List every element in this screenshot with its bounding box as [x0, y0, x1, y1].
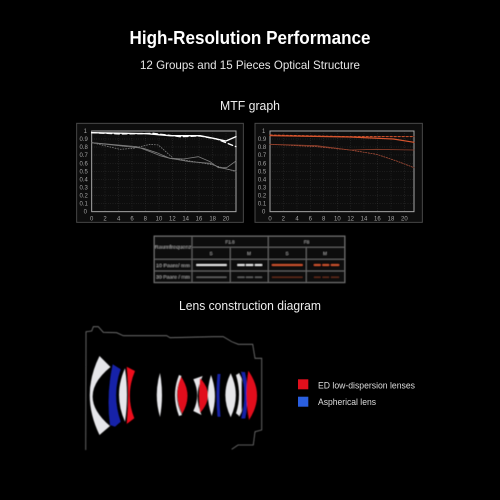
chart: MTF F8 (orange curves): 0.1 [258, 201, 267, 207]
legend: aspherical lens: Aspherical lens [318, 397, 376, 407]
legend table: F1.8 [225, 240, 235, 244]
lens barrel outline [86, 327, 262, 450]
chart: MTF F1.8 (white curves): 0.6 [80, 161, 88, 167]
chart: MTF F1.8 (white curves): 16 [196, 216, 203, 222]
chart: MTF F8 (orange curves): 0.4 [258, 177, 267, 183]
chart: MTF F8 (orange curves): 6 [309, 216, 313, 222]
legend: ED low-dispersion lenses: ED low-dispersion lenses [318, 380, 415, 390]
chart: MTF F8 (orange curves): 4 [295, 216, 299, 222]
lens group 3 [175, 371, 257, 420]
legend table: Raumfrequenz [154, 244, 192, 250]
chart: MTF F8 (orange curves): 0.9 [258, 137, 267, 143]
chart: MTF F1.8 (white curves): 1 [84, 129, 88, 135]
chart: MTF F8 (orange curves): 8 [322, 216, 326, 222]
legend: aspherical lens [298, 397, 376, 407]
chart: MTF F8 (orange curves): 0.5 [258, 169, 267, 175]
chart: MTF F1.8 (white curves): 0.3 [80, 185, 88, 191]
chart: MTF F8 (orange curves): 0.2 [258, 193, 267, 199]
chart: MTF F8 (orange curves): 0.3 [258, 185, 267, 191]
chart: MTF F8 (orange curves): 14 [361, 216, 368, 222]
chart: MTF F1.8 (white curves): 10 [156, 216, 163, 222]
chart: MTF F1.8 (white curves): 0 [84, 209, 88, 215]
legend table: 10 Paare/ mm [156, 263, 190, 268]
heading: MTF graph: MTF graph [220, 98, 280, 113]
chart: MTF F8 (orange curves): 0 [262, 209, 266, 215]
legend table: 30 Paare / mm [156, 275, 190, 280]
chart: MTF F8 (orange curves): 2 [282, 216, 286, 222]
chart: MTF F1.8 (white curves) [77, 123, 243, 222]
chart: MTF F8 (orange curves): 18 [388, 216, 395, 222]
chart: MTF F8 (orange curves): 0 [268, 216, 272, 222]
chart: MTF F8 (orange curves): 0.8 [258, 145, 267, 151]
chart: MTF F1.8 (white curves): 8 [144, 216, 148, 222]
chart: MTF F1.8 (white curves): 2 [103, 216, 107, 222]
chart: MTF F1.8 (white curves): 0.9 [80, 137, 88, 143]
chart: MTF F1.8 (white curves): 0.2 [80, 193, 88, 199]
chart: MTF F1.8 (white curves): 0 [90, 216, 94, 222]
legend table [154, 236, 345, 283]
chart: MTF F1.8 (white curves): 0.7 [80, 153, 88, 159]
legend table: S [209, 251, 213, 256]
chart: MTF F8 (orange curves) [255, 123, 422, 222]
chart: MTF F1.8 (white curves): 6 [130, 216, 134, 222]
lens 2: thin element [157, 373, 162, 417]
chart: MTF F1.8 (white curves): 4 [117, 216, 121, 222]
chart: MTF F8 (orange curves): 1 [262, 129, 266, 135]
chart: MTF F1.8 (white curves): 0.8 [80, 145, 88, 151]
chart: MTF F8 (orange curves): 16 [374, 216, 381, 222]
chart: MTF F1.8 (white curves): 0.1 [80, 201, 88, 207]
chart: MTF F1.8 (white curves): 12 [169, 216, 176, 222]
legend table: F8 [304, 240, 310, 244]
lens construction diagram [90, 356, 257, 435]
lens group 1 [90, 356, 135, 435]
chart: MTF F8 (orange curves): 10 [334, 216, 341, 222]
legend table: M [323, 251, 327, 256]
legend table: S [285, 251, 289, 256]
chart: MTF F1.8 (white curves): 0.5 [80, 169, 88, 175]
chart: MTF F8 (orange curves): 12 [347, 216, 355, 222]
chart: MTF F1.8 (white curves): 0.4 [80, 177, 88, 183]
legend table: M [247, 251, 251, 256]
chart: MTF F8 (orange curves): 20 [401, 216, 408, 222]
chart: MTF F1.8 (white curves): 18 [209, 216, 217, 222]
heading: Lens construction diagram: Lens construction diagram [179, 298, 321, 313]
chart: MTF F1.8 (white curves): 14 [182, 216, 190, 222]
chart: MTF F8 (orange curves): 0.7 [258, 153, 267, 159]
title: High-Resolution Performance [130, 27, 370, 48]
chart: MTF F1.8 (white curves): 20 [223, 216, 230, 222]
chart: MTF F8 (orange curves): 0.6 [258, 161, 267, 167]
subtitle: 12 Groups and 15 Pieces Optical Structure [140, 58, 360, 72]
